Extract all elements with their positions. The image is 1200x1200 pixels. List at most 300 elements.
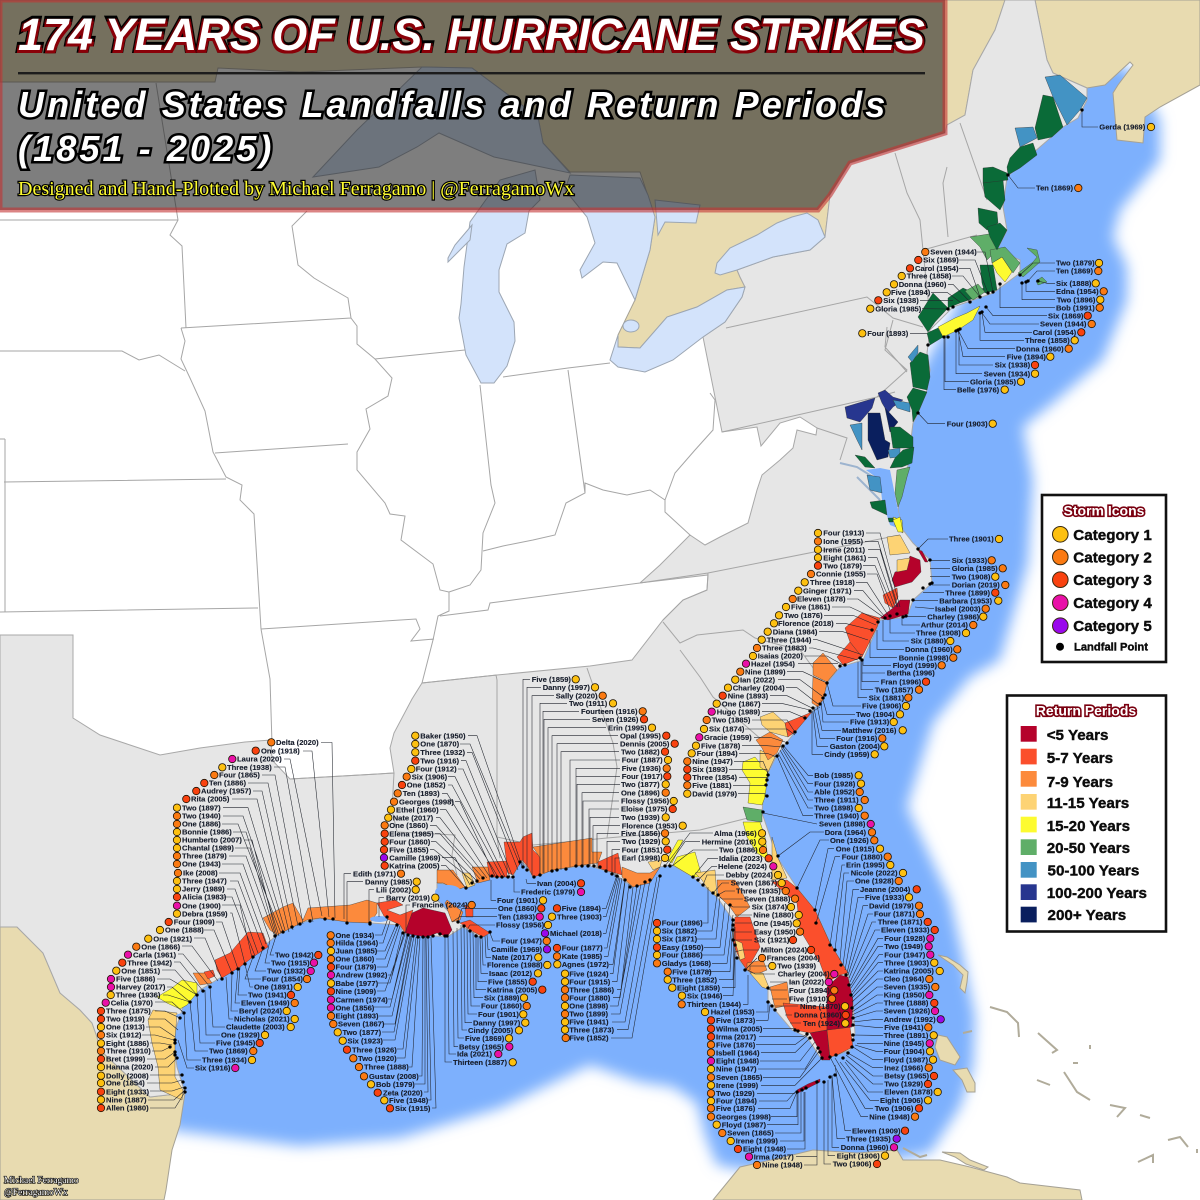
Florida panhandle south storm labels: Five (1941) xyxy=(569,1018,609,1027)
Florida interior storm labels: One (1945) xyxy=(753,919,793,928)
Carolinas and Georgia right storm labels: Donna (1960) xyxy=(905,645,953,654)
Texas left storm labels: Jerry (1989) xyxy=(182,885,225,894)
Florida west coast storm labels: Wilma (2005) xyxy=(716,1024,763,1033)
Northeast storm labels: Carol (1954) xyxy=(1033,328,1077,337)
Florida panhandle north storm labels: One (1896) xyxy=(621,788,660,797)
Carolinas and Georgia right storm labels: Four (1928) xyxy=(814,779,856,788)
Louisiana delta storm labels: Frederic (1979) xyxy=(521,888,575,897)
credit xyxy=(4,1176,79,1198)
Florida west coast storm labels: Six (1946) xyxy=(687,991,723,1000)
Louisiana west storm labels: Eight (1893) xyxy=(336,1012,379,1021)
Florida panhandle south storm labels: Three (1886) xyxy=(569,985,615,994)
Florida east coast storm labels: Donna (1960) xyxy=(841,1143,889,1152)
Carolinas and Georgia right storm labels: Two (1908) xyxy=(952,572,991,581)
Florida panhandle south storm labels: Michael (2018) xyxy=(550,929,602,938)
legend item: 5-7 years xyxy=(1021,749,1113,767)
Louisiana west storm labels: Two (1920) xyxy=(358,1054,397,1063)
Florida east coast storm labels: Two (1929) xyxy=(884,1080,923,1089)
Texas right storm labels xyxy=(195,951,322,1073)
Northeast storm labels: Seven (1934) xyxy=(984,369,1031,378)
Northeast storm labels: Donna (1960) xyxy=(1016,344,1064,353)
Louisiana delta storm labels: Ida (2021) xyxy=(457,1050,493,1059)
Florida interior storm labels: Nine (1870) xyxy=(800,1002,841,1011)
Florida panhandle north storm labels: Erin (1995) xyxy=(608,723,647,732)
Carolinas and Georgia right storm labels: Matthew (2016) xyxy=(842,726,897,735)
Northeast storm labels: Six (1938) xyxy=(995,361,1031,370)
Louisiana delta storm labels: Florence (1988) xyxy=(487,961,543,970)
Carolinas and Georgia right storm labels: Three (1908) xyxy=(916,629,961,638)
Northeast storm labels: Six (1938) xyxy=(883,296,919,305)
Florida east coast storm labels: Two (1906) xyxy=(875,1104,914,1113)
Northeast coast xyxy=(918,75,1087,345)
Florida east coast storm labels: Eleven (1878) xyxy=(884,1088,933,1097)
Florida east coast storm labels: Dora (1964) xyxy=(825,828,867,837)
Florida east coast storm labels: Katrina (2005) xyxy=(884,967,934,976)
Texas left storm labels: One (1851) xyxy=(121,966,161,975)
Carolinas and Georgia left storm labels: Connie (1955) xyxy=(816,570,866,579)
Florida peninsula xyxy=(667,807,853,1093)
legend item: under 5 years xyxy=(1021,726,1109,744)
Florida interior storm labels: Five (1910) xyxy=(789,994,829,1003)
Florida panhandle north storm labels: Flossy (1956) xyxy=(621,797,670,806)
Texas right storm labels: One (1891) xyxy=(254,983,293,992)
Texas right storm labels: Four (1854) xyxy=(262,975,303,984)
Louisiana west storm labels: Two (1877) xyxy=(342,1028,382,1037)
Carolinas and Georgia right storm labels: Four (1916) xyxy=(836,734,878,743)
Louisiana delta storm labels: Ten (1893) xyxy=(498,912,535,921)
Florida east coast storm labels: Three (1871) xyxy=(878,918,923,927)
Florida east coast storm labels: Three (1891) xyxy=(884,1031,929,1040)
legend item: 20-50 years: 20-50 Years xyxy=(1047,840,1130,857)
Florida panhandle north storm labels: Five (1856) xyxy=(621,829,661,838)
Texas right storm labels: Two (1869) xyxy=(209,1047,248,1056)
Louisiana delta storm labels: Thirteen (1887) xyxy=(453,1058,507,1067)
Carolinas and Georgia left storm labels: Five (1861) xyxy=(791,603,831,612)
Florida interior storm labels: Three (1935) xyxy=(736,887,781,896)
Mississippi and Alabama storm labels: Camille (1969) xyxy=(389,853,441,862)
Florida interior storm labels: Ten (1924) xyxy=(803,1019,840,1028)
Texas left storm labels: Ten (1886) xyxy=(209,779,246,788)
Texas left storm labels: One (1900) xyxy=(182,901,221,910)
Bahamas islands xyxy=(903,1007,1197,1163)
Florida east coast storm labels: Five (1933) xyxy=(865,893,905,902)
Florida panhandle north storm labels: Two (1911) xyxy=(569,699,608,708)
Louisiana west storm labels: Juan (1985) xyxy=(336,947,378,956)
Louisiana west storm labels: Seven (1867) xyxy=(338,1020,385,1029)
Louisiana west storm labels: One (1856) xyxy=(336,1003,375,1012)
Northeast storm labels: Gerda (1969) xyxy=(1099,123,1146,132)
Texas left storm labels: Three (1936) xyxy=(116,991,161,1000)
Texas right storm labels: Beryl (2024) xyxy=(239,1007,283,1016)
leader lines xyxy=(142,110,1098,1165)
Louisiana delta storm labels: Four (1901) xyxy=(497,896,538,905)
Louisiana delta storm labels: Danny (1985) xyxy=(365,877,413,886)
Carolinas and Georgia left storm labels xyxy=(684,529,867,798)
legend item: under 5 years: <5 Years xyxy=(1047,727,1109,744)
Northeast storm labels: Three (1858) xyxy=(1025,336,1070,345)
legend item: category 3: Category 3 xyxy=(1073,572,1152,589)
Florida panhandle north storm labels: Five (1859) xyxy=(532,675,571,684)
Louisiana west storm labels: Six (1923) xyxy=(348,1036,383,1045)
Northeast storm labels: Seven (1944) xyxy=(930,248,977,257)
Northeast storm labels: Five (1894) xyxy=(891,288,931,297)
Florida west coast storm labels: Nine (1947) xyxy=(716,1065,757,1074)
Texas left storm labels: Five (1886) xyxy=(116,975,156,984)
Florida panhandle south storm labels: Four (1880) xyxy=(569,993,611,1002)
Louisiana west storm labels: One (1934) xyxy=(336,931,375,940)
Louisiana delta storm labels: Francine (2024) xyxy=(412,901,468,910)
Florida panhandle south storm labels: Two (1899) xyxy=(569,1010,608,1019)
Florida panhandle north storm labels xyxy=(532,675,686,863)
Carolinas and Georgia left storm labels: Three (1854) xyxy=(692,773,738,782)
Carolinas and Georgia right storm labels: Gaston (2004) xyxy=(830,742,880,751)
Florida panhandle north storm labels: Seven (1926) xyxy=(592,715,639,724)
Florida panhandle north storm labels: Four (1851) xyxy=(622,845,663,854)
Northeast storm labels xyxy=(859,123,1155,428)
Texas left storm labels: Four (1909) xyxy=(174,918,215,927)
Florida east coast storm labels: Seven (1898) xyxy=(819,820,866,829)
Florida west coast storm labels: Five (1873) xyxy=(716,1016,756,1025)
Louisiana delta storm labels: Four (1947) xyxy=(501,937,542,946)
legend item: 200+ years: 200+ Years xyxy=(1048,907,1126,924)
byline: Designed and Hand-Plotted by Michael Ferragamo | @FerragamoWx xyxy=(18,178,574,200)
Northeast storm labels: Gloria (1985) xyxy=(875,304,922,313)
Carolinas and Georgia right storm labels: Two (1904) xyxy=(856,710,895,719)
Florida east coast storm labels: Four (1904) xyxy=(884,1047,925,1056)
Carolinas and Georgia left storm labels: Nine (1899) xyxy=(745,667,786,676)
Carolinas and Georgia right storm labels: Three (1899) xyxy=(945,588,991,597)
Carolinas and Georgia right storm labels: Gloria (1985) xyxy=(952,564,998,573)
Louisiana delta storm labels: Lili (2002) xyxy=(376,885,411,894)
Florida east coast storm labels: Eleven (1909) xyxy=(852,1126,901,1135)
legend: return periods xyxy=(1007,696,1166,932)
legend: storm icons xyxy=(1042,495,1166,662)
Mississippi and Alabama storm labels: Six (1906) xyxy=(412,772,448,781)
Texas right storm labels: Three (1934) xyxy=(202,1056,247,1065)
Florida panhandle north storm labels: Four (1917) xyxy=(622,772,663,781)
Louisiana delta storm labels: Nate (2017) xyxy=(492,953,533,962)
Carolinas and Georgia right storm labels: Bonnie (1998) xyxy=(899,653,949,662)
Carolinas and Georgia right storm labels xyxy=(814,535,1009,820)
Texas left storm labels: Three (1879) xyxy=(182,852,227,861)
Mississippi and Alabama storm labels xyxy=(380,731,466,870)
Northeast storm labels: Two (1896) xyxy=(1057,295,1096,304)
Mississippi and Alabama storm labels: Nate (2017) xyxy=(393,813,434,822)
Florida panhandle north storm labels: Opal (1995) xyxy=(620,731,661,740)
Carolinas and Georgia right storm labels: Cindy (1959) xyxy=(824,750,870,759)
Carolinas and Georgia left storm labels: One (1867) xyxy=(722,699,761,708)
Texas right storm labels: Eleven (1949) xyxy=(241,999,290,1008)
Florida east coast storm labels: Three (1935) xyxy=(846,1134,891,1143)
Florida panhandle north storm labels: Eloise (1975) xyxy=(621,805,668,814)
Florida interior storm labels: Ian (2022) xyxy=(789,978,825,987)
Texas left storm labels: Two (1919) xyxy=(106,1015,145,1024)
legend item: 11-15 years: 11-15 Years xyxy=(1047,795,1129,812)
Florida east coast storm labels: One (1915) xyxy=(836,844,875,853)
Florida east coast storm labels: Four (1871) xyxy=(874,910,915,919)
Florida east coast storm labels: Four (1928) xyxy=(884,934,926,943)
Florida east coast storm labels: Eight (1906) xyxy=(880,1096,924,1105)
Carolinas and Georgia left storm labels: Nine (1893) xyxy=(728,691,769,700)
Mississippi and Alabama storm labels: Ethel (1960) xyxy=(396,805,439,814)
Carolinas and Georgia left storm labels: Five (1881) xyxy=(692,781,732,790)
Carolinas and Georgia right storm labels: Isabel (2003) xyxy=(935,604,981,613)
Florida panhandle south storm labels: Three (1903) xyxy=(557,912,602,921)
Texas left storm labels: One (1888) xyxy=(165,926,204,935)
Texas left storm labels: Alicia (1983) xyxy=(182,893,227,902)
legend item: 15-20 years: 15-20 Years xyxy=(1047,818,1130,835)
Carolinas and Georgia right storm labels: Bob (1985) xyxy=(814,771,854,780)
Florida east coast storm labels: Cleo (1964) xyxy=(884,975,925,984)
Texas left storm labels: Audrey (1957) xyxy=(201,787,252,796)
Chesapeake and Delmarva xyxy=(845,345,930,532)
Florida east coast storm labels: Eight (1906) xyxy=(837,1151,880,1160)
title panel background xyxy=(0,0,945,210)
Texas left storm labels: One (1913) xyxy=(106,1023,145,1032)
Florida panhandle south storm labels: Four (1877) xyxy=(562,944,603,953)
Carolinas and Georgia left storm labels: Two (1885) xyxy=(712,716,751,725)
Carolinas and Georgia right storm labels: Arthur (2014) xyxy=(921,621,968,630)
Carolinas and Georgia left storm labels: Florence (2018) xyxy=(778,619,834,628)
Northeast storm labels: Ten (1869) xyxy=(1036,184,1073,193)
Louisiana west storm labels xyxy=(327,931,431,1113)
Texas left storm labels: Three (1910) xyxy=(106,1047,151,1056)
Northeast storm labels: Belle (1976) xyxy=(957,385,1000,394)
Northeast storm labels: Six (1869) xyxy=(923,256,959,265)
Texas left storm labels: Carla (1961) xyxy=(133,950,177,959)
Florida interior storm labels: Six (1921) xyxy=(754,936,790,945)
Florida interior storm labels: Hermine (2016) xyxy=(702,837,757,846)
Texas left storm labels: One (1921) xyxy=(153,934,193,943)
Florida west coast storm labels: Four (1894) xyxy=(716,1097,757,1106)
Florida east coast storm labels: Betsy (1965) xyxy=(884,1072,930,1081)
Northeast storm labels: Bob (1991) xyxy=(1056,303,1095,312)
Mississippi and Alabama storm labels: Four (1860) xyxy=(389,837,431,846)
Texas left storm labels: Laura (2020) xyxy=(237,755,282,764)
Florida east coast storm labels: Jeanne (2004) xyxy=(860,885,911,894)
Florida west coast storm labels xyxy=(653,919,803,1170)
Northeast storm labels: Donna (1960) xyxy=(899,280,947,289)
Texas left storm labels: Three (1947) xyxy=(182,877,227,886)
Florida west coast storm labels: Irene (1999) xyxy=(716,1081,759,1090)
Carolinas and Georgia left storm labels: Two (1876) xyxy=(784,611,823,620)
Florida west coast storm labels: Two (1929) xyxy=(716,1089,755,1098)
Carolinas and Georgia left storm labels: Isaias (2020) xyxy=(758,652,803,661)
Florida interior storm labels: Helene (2024) xyxy=(718,862,767,871)
Florida east coast storm labels: David (1979) xyxy=(869,901,914,910)
Florida west coast storm labels: Five (1876) xyxy=(716,1040,756,1049)
Texas left storm labels: One (1866) xyxy=(141,942,181,951)
Florida west coast storm labels: Eight (1948) xyxy=(716,1057,760,1066)
Mississippi and Alabama storm labels: Four (1912) xyxy=(416,765,457,774)
rivers and bays xyxy=(840,463,880,500)
Carolinas and Georgia right storm labels: Six (1880) xyxy=(911,637,947,646)
legend: storm icons: Storm Icons xyxy=(1064,502,1145,518)
Carolinas and Georgia left storm labels: Ione (1955) xyxy=(823,537,863,546)
Louisiana delta storm labels: Flossy (1956) xyxy=(496,921,545,930)
Texas left storm labels: Two (1940) xyxy=(182,812,221,821)
Mississippi and Alabama storm labels: One (1870) xyxy=(420,740,460,749)
Florida west coast storm labels: Isbell (1964) xyxy=(716,1048,760,1057)
Carolinas and Georgia right storm labels: Charley (1986) xyxy=(927,612,980,621)
Texas left storm labels: Ike (2008) xyxy=(183,869,218,878)
Texas right storm labels: Six (1916) xyxy=(195,1064,231,1073)
Mississippi and Alabama storm labels: Baker (1950) xyxy=(420,731,466,740)
Florida east coast storm labels: One (1928) xyxy=(855,877,894,886)
Florida west coast storm labels: Six (1871) xyxy=(662,935,698,944)
Northeast storm labels: Six (1869) xyxy=(1048,311,1084,320)
legend item: category 2: Category 2 xyxy=(1073,550,1152,566)
Florida interior storm labels: Six (1874) xyxy=(752,903,788,912)
Louisiana west storm labels: Carmen (1974) xyxy=(336,995,388,1004)
Carolinas and Georgia right storm labels: Dorian (2019) xyxy=(952,581,1000,590)
Florida east coast storm labels: One (1926) xyxy=(830,836,869,845)
Louisiana delta storm labels: Edith (1971) xyxy=(353,869,397,878)
Louisiana delta storm labels: Camille (1969) xyxy=(491,945,543,954)
Florida east coast storm labels: Two (1949) xyxy=(884,942,923,951)
legend item: category 1: Category 1 xyxy=(1073,527,1152,544)
Carolinas and Georgia right storm labels: Able (1952) xyxy=(814,788,855,797)
Florida west coast storm labels: Four (1886) xyxy=(662,951,703,960)
Florida west coast storm labels: Nine (1948) xyxy=(762,1161,803,1170)
Carolinas and Georgia left storm labels: Irene (2011) xyxy=(823,545,866,554)
Florida panhandle north storm labels: Danny (1997) xyxy=(543,683,590,692)
landfall points xyxy=(170,110,1082,1092)
Carolinas and Georgia left storm labels: Three (1944) xyxy=(767,635,812,644)
Florida panhandle south storm labels: Four (1915) xyxy=(569,977,611,986)
Florida east coast storm labels: Five (1941) xyxy=(884,1023,924,1032)
Florida west coast storm labels: Irma (2017) xyxy=(716,1032,757,1041)
Carolinas and Georgia left storm labels: Eleven (1878) xyxy=(797,595,846,604)
Carolinas and Georgia left storm labels: David (1979) xyxy=(692,789,738,798)
legend item: category 5: Category 5 xyxy=(1073,618,1152,635)
Louisiana west storm labels: Babe (1977) xyxy=(336,979,379,988)
Florida interior storm labels: Two (1886) xyxy=(719,846,758,855)
Florida west coast storm labels: Easy (1950) xyxy=(662,943,704,952)
Florida panhandle south storm labels xyxy=(541,904,615,1043)
Texas left storm labels: Six (1912) xyxy=(106,1031,142,1040)
Louisiana delta storm labels: Danny (1997) xyxy=(473,1018,521,1027)
Northeast storm labels: Five (1894) xyxy=(1007,352,1046,361)
Carolinas and Georgia left storm labels: Ian (2022) xyxy=(740,675,776,684)
Florida interior storm labels: Four (1894) xyxy=(789,986,830,995)
Great Lakes xyxy=(313,67,825,383)
Florida interior storm labels: Frances (2004) xyxy=(767,954,820,963)
Texas left storm labels: Harvey (2017) xyxy=(116,983,166,992)
Florida east coast storm labels: Seven (1935) xyxy=(884,983,931,992)
Texas left storm labels: Rita (2005) xyxy=(191,795,230,804)
Florida east coast storm labels: Nicole (2022) xyxy=(851,869,898,878)
Louisiana west storm labels: Hilda (1964) xyxy=(336,939,379,948)
title: 174 YEARS OF U.S. HURRICANE STRIKES xyxy=(18,9,925,60)
Florida west coast storm labels: Three (1852) xyxy=(672,975,718,984)
Louisiana west storm labels: Three (1888) xyxy=(364,1063,409,1072)
Florida east coast storm labels: Four (1947) xyxy=(884,950,926,959)
Florida west coast storm labels: Irene (1999) xyxy=(736,1137,778,1146)
Florida panhandle north storm labels: Two (1929) xyxy=(622,837,661,846)
Florida panhandle north storm labels: Florence (1953) xyxy=(622,821,678,830)
Louisiana delta storm labels: Five (1855) xyxy=(488,977,528,986)
Carolinas and Georgia left storm labels: Diana (1984) xyxy=(773,627,818,636)
Louisiana delta storm labels: Cindy (2005) xyxy=(468,1026,514,1035)
Louisiana west storm labels: Three (1926) xyxy=(352,1045,397,1054)
Carolinas and Georgia left storm labels: Five (1878) xyxy=(701,741,741,750)
Northeast storm labels: Edna (1954) xyxy=(1056,287,1099,296)
Florida east coast storm labels: King (1950) xyxy=(884,991,925,1000)
Florida interior storm labels: Easy (1950) xyxy=(754,927,796,936)
legend item: 100-200 years: 100-200 Years xyxy=(1047,885,1147,902)
Florida west coast storm labels: Eight (1859) xyxy=(677,983,721,992)
Louisiana west storm labels: Zeta (2020) xyxy=(383,1088,423,1097)
Florida west coast storm labels: Irma (2017) xyxy=(754,1152,794,1161)
Florida interior storm labels: Alma (1966) xyxy=(714,829,757,838)
Louisiana west storm labels: Andrew (1992) xyxy=(336,971,388,980)
Texas left storm labels: One (1854) xyxy=(106,1079,145,1088)
legend item: 7-9 years: 7-9 Years xyxy=(1047,774,1113,791)
Carolinas and Georgia right storm labels: Five (1913) xyxy=(850,718,890,727)
Carolinas and Georgia right storm labels: Floyd (1999) xyxy=(893,661,937,670)
date range: (1851 - 2025) xyxy=(18,128,274,169)
Florida panhandle south storm labels: One (1898) xyxy=(569,1002,609,1011)
Texas coast xyxy=(148,900,377,1100)
Texas left storm labels: Three (1938) xyxy=(227,763,272,772)
Texas left storm labels: Humberto (2007) xyxy=(182,836,242,845)
Texas left storm labels: Eight (1933) xyxy=(106,1087,150,1096)
Louisiana delta storm labels: Four (1860) xyxy=(481,1002,522,1011)
Louisiana west storm labels: One (1860) xyxy=(336,955,375,964)
Louisiana west storm labels: Nine (1909) xyxy=(336,987,376,996)
Florida interior storm labels xyxy=(702,829,849,1028)
Florida panhandle south storm labels: Three (1873) xyxy=(569,1025,615,1034)
Florida east coast storm labels: Floyd (1987) xyxy=(884,1055,928,1064)
Louisiana delta storm labels: Five (1869) xyxy=(465,1034,505,1043)
Florida panhandle north storm labels: Two (1877) xyxy=(621,780,660,789)
Texas left storm labels: One (1943) xyxy=(182,860,221,869)
Louisiana west storm labels: Six (1915) xyxy=(395,1104,431,1113)
Carolinas and Georgia right storm labels: Bertha (1996) xyxy=(887,669,935,678)
Florida panhandle north storm labels: Four (1887) xyxy=(622,756,663,765)
Carolinas and Georgia left storm labels: Eight (1861) xyxy=(823,553,867,562)
Florida panhandle south storm labels: Five (1894) xyxy=(562,904,601,913)
Florida east coast storm labels: Three (1903) xyxy=(884,958,930,967)
Texas right storm labels: Two (1941) xyxy=(248,991,287,1000)
Carolinas and Georgia right storm labels: Six (1933) xyxy=(952,556,988,565)
Florida west coast storm labels: Seven (1865) xyxy=(727,1129,774,1138)
Florida west coast storm labels: Gladys (1968) xyxy=(662,959,712,968)
legend: return periods: Return Periods xyxy=(1036,702,1136,718)
Northeast storm labels: Six (1888) xyxy=(1056,279,1092,288)
Northeast storm labels: Four (1903) xyxy=(947,419,988,428)
Carolinas and Georgia left storm labels: Four (1894) xyxy=(697,749,738,758)
Louisiana delta storm labels xyxy=(353,869,585,1067)
Carolinas and Georgia left storm labels: Six (1874) xyxy=(709,725,745,734)
Carolinas and Georgia right storm labels: Two (1857) xyxy=(875,685,914,694)
Carolinas and Georgia left storm labels: Nine (1947) xyxy=(692,757,733,766)
Mississippi and Alabama storm labels: Katrina (2005) xyxy=(389,861,440,870)
Texas right storm labels: Claudette (2003) xyxy=(226,1023,285,1032)
Florida west coast storm labels: Five (1878) xyxy=(672,967,712,976)
Mississippi and Alabama storm labels: Three (1932) xyxy=(420,748,466,757)
Carolinas and Georgia left storm labels: Six (1893) xyxy=(692,765,728,774)
Texas left storm labels: One (1918) xyxy=(261,746,300,755)
Mississippi and Alabama storm labels: Ten (1893) xyxy=(403,789,440,798)
Florida west coast storm labels: Five (1876) xyxy=(716,1104,756,1113)
Carolinas and Georgia right storm labels: Barbara (1953) xyxy=(939,596,993,605)
Florida east coast storm labels: Andrew (1992) xyxy=(884,1015,936,1024)
Texas left storm labels: Three (1942) xyxy=(127,958,173,967)
Florida panhandle south storm labels: Five (1924) xyxy=(569,969,609,978)
Florida panhandle south storm labels: Five (1852) xyxy=(569,1034,609,1043)
